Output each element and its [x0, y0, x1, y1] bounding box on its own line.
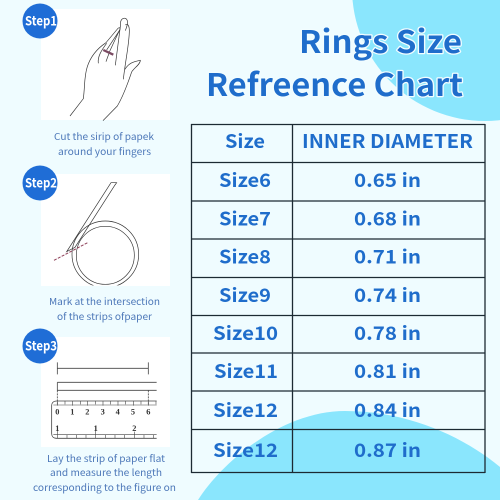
table rows: 0.74 in — [354, 281, 421, 308]
background blob: top right — [352, 0, 500, 121]
table rows: 0.81 in — [354, 357, 421, 384]
step 1 caption — [54, 129, 155, 158]
step 2 caption: of the strips ofpaper — [57, 309, 152, 323]
table rows: Size10 — [213, 319, 278, 346]
icon: ruler with paper strip: 3 — [101, 407, 105, 416]
table rows — [213, 166, 421, 463]
table rows: 0.65 in — [354, 166, 421, 193]
title: Refreence Chart — [206, 60, 463, 105]
step 2 caption — [49, 294, 160, 323]
step 3 image panel — [41, 337, 170, 447]
step 3 caption: Lay the strip of paper flat — [47, 451, 165, 465]
step 1 badge: Step1 — [25, 10, 57, 30]
step 3 caption: and measure the length — [50, 465, 162, 479]
icon: ruler with paper strip: 1 — [94, 424, 98, 433]
table rows: 0.71 in — [354, 242, 421, 270]
table rows: 0.87 in — [354, 436, 421, 463]
table grid — [191, 124, 485, 473]
icon: ruler with paper strip: 1 — [55, 424, 59, 433]
table rows: Size8 — [219, 242, 271, 270]
icon: ruler with paper strip: 6 — [146, 407, 150, 416]
step 2 badge — [22, 166, 58, 200]
table header: INNER DIAMETER — [302, 127, 473, 154]
step 1 image panel — [41, 9, 170, 120]
icon: paper strip loop with mark — [54, 183, 139, 288]
step 3 badge: Step3 — [25, 336, 57, 354]
table rows: Size11 — [214, 357, 278, 384]
icon: ruler with paper strip: 2 — [132, 424, 136, 433]
icon: ruler with paper strip: 1 — [70, 407, 74, 416]
title — [206, 17, 463, 105]
table rows: 0.68 in — [354, 204, 421, 232]
icon: ruler with paper strip: 5 — [131, 407, 135, 416]
step 1 badge — [22, 4, 58, 38]
step 3 caption — [33, 451, 176, 494]
icon: ruler with paper strip: 4 — [116, 407, 121, 416]
step 2 image panel — [41, 174, 170, 286]
step 3 caption: corresponding to the figure on — [33, 480, 176, 494]
table header — [225, 127, 473, 154]
table rows: 0.78 in — [354, 319, 421, 346]
background blob: bottom — [198, 411, 500, 500]
icon: ruler with paper strip: 0 — [55, 407, 59, 416]
step 1 caption: around your fingers — [58, 144, 152, 158]
step 2 caption: Mark at the intersection — [49, 294, 160, 308]
title: Rings Size — [299, 17, 462, 62]
panel: step 1 — [22, 4, 170, 158]
table rows: Size9 — [219, 281, 271, 308]
icon: ruler with paper strip — [52, 362, 157, 438]
step 2 badge: Step2 — [25, 172, 57, 192]
table header: Size — [225, 127, 265, 154]
table rows: Size6 — [219, 166, 271, 193]
step 3 badge — [22, 328, 58, 364]
table rows: Size7 — [219, 204, 271, 232]
table rows: Size12 — [213, 396, 278, 423]
icon: hand with ring — [70, 18, 140, 121]
panel: step 2 — [22, 166, 170, 323]
table rows: 0.84 in — [354, 396, 421, 423]
table rows: Size12 — [213, 436, 278, 463]
icon: ruler with paper strip: 2 — [85, 407, 89, 416]
step 1 caption: Cut the sirip of papek — [54, 129, 155, 143]
panel: step 3 — [22, 328, 176, 494]
size table — [191, 124, 485, 473]
